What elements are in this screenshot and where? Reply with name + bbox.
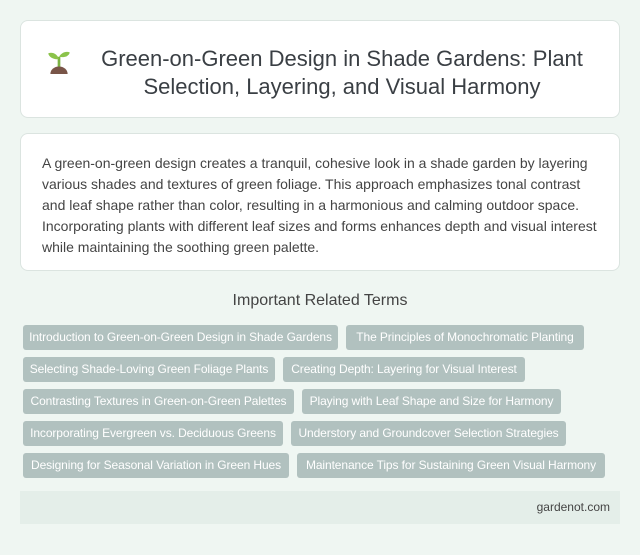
title: Green-on-Green Design in Shade Gardens: Plant Selection, Layering, and Visual Harmony: [101, 46, 583, 99]
icon: seedling: [48, 52, 70, 74]
tags: Maintenance Tips for Sustaining Green Visual Harmony: [306, 458, 596, 472]
description card: [20, 133, 620, 271]
tags: Designing for Seasonal Variation in Green Hues: [31, 458, 281, 472]
tags: Incorporating Evergreen vs. Deciduous Greens: [30, 426, 276, 440]
tags: Creating Depth: Layering for Visual Interest: [291, 362, 517, 376]
tags: Playing with Leaf Shape and Size for Harmony: [310, 394, 553, 408]
tags: Introduction to Green-on-Green Design in Shade Gardens: [29, 330, 332, 344]
title card: [20, 20, 620, 118]
tags: Selecting Shade-Loving Green Foliage Plants: [30, 362, 268, 376]
heading: related terms: Important Related Terms: [233, 292, 407, 309]
tags: Contrasting Textures in Green-on-Green Palettes: [31, 394, 286, 408]
description text: A green-on-green design creates a tranquil, cohesive look in a shade garden by layering various shades and textures of green foliage. This approach emphasizes tonal contrast and leaf shape rather than color, resulting in a harmonious and calming outdoor space. Incorporating plants with different leaf sizes and forms enhances depth and visual interest while maintaining the soothing green palette.: [42, 155, 597, 255]
footer: [20, 491, 620, 524]
footer text: gardenot.com: [537, 500, 610, 514]
tags: Understory and Groundcover Selection Strategies: [298, 426, 559, 440]
tags: The Principles of Monochromatic Planting: [356, 330, 574, 344]
